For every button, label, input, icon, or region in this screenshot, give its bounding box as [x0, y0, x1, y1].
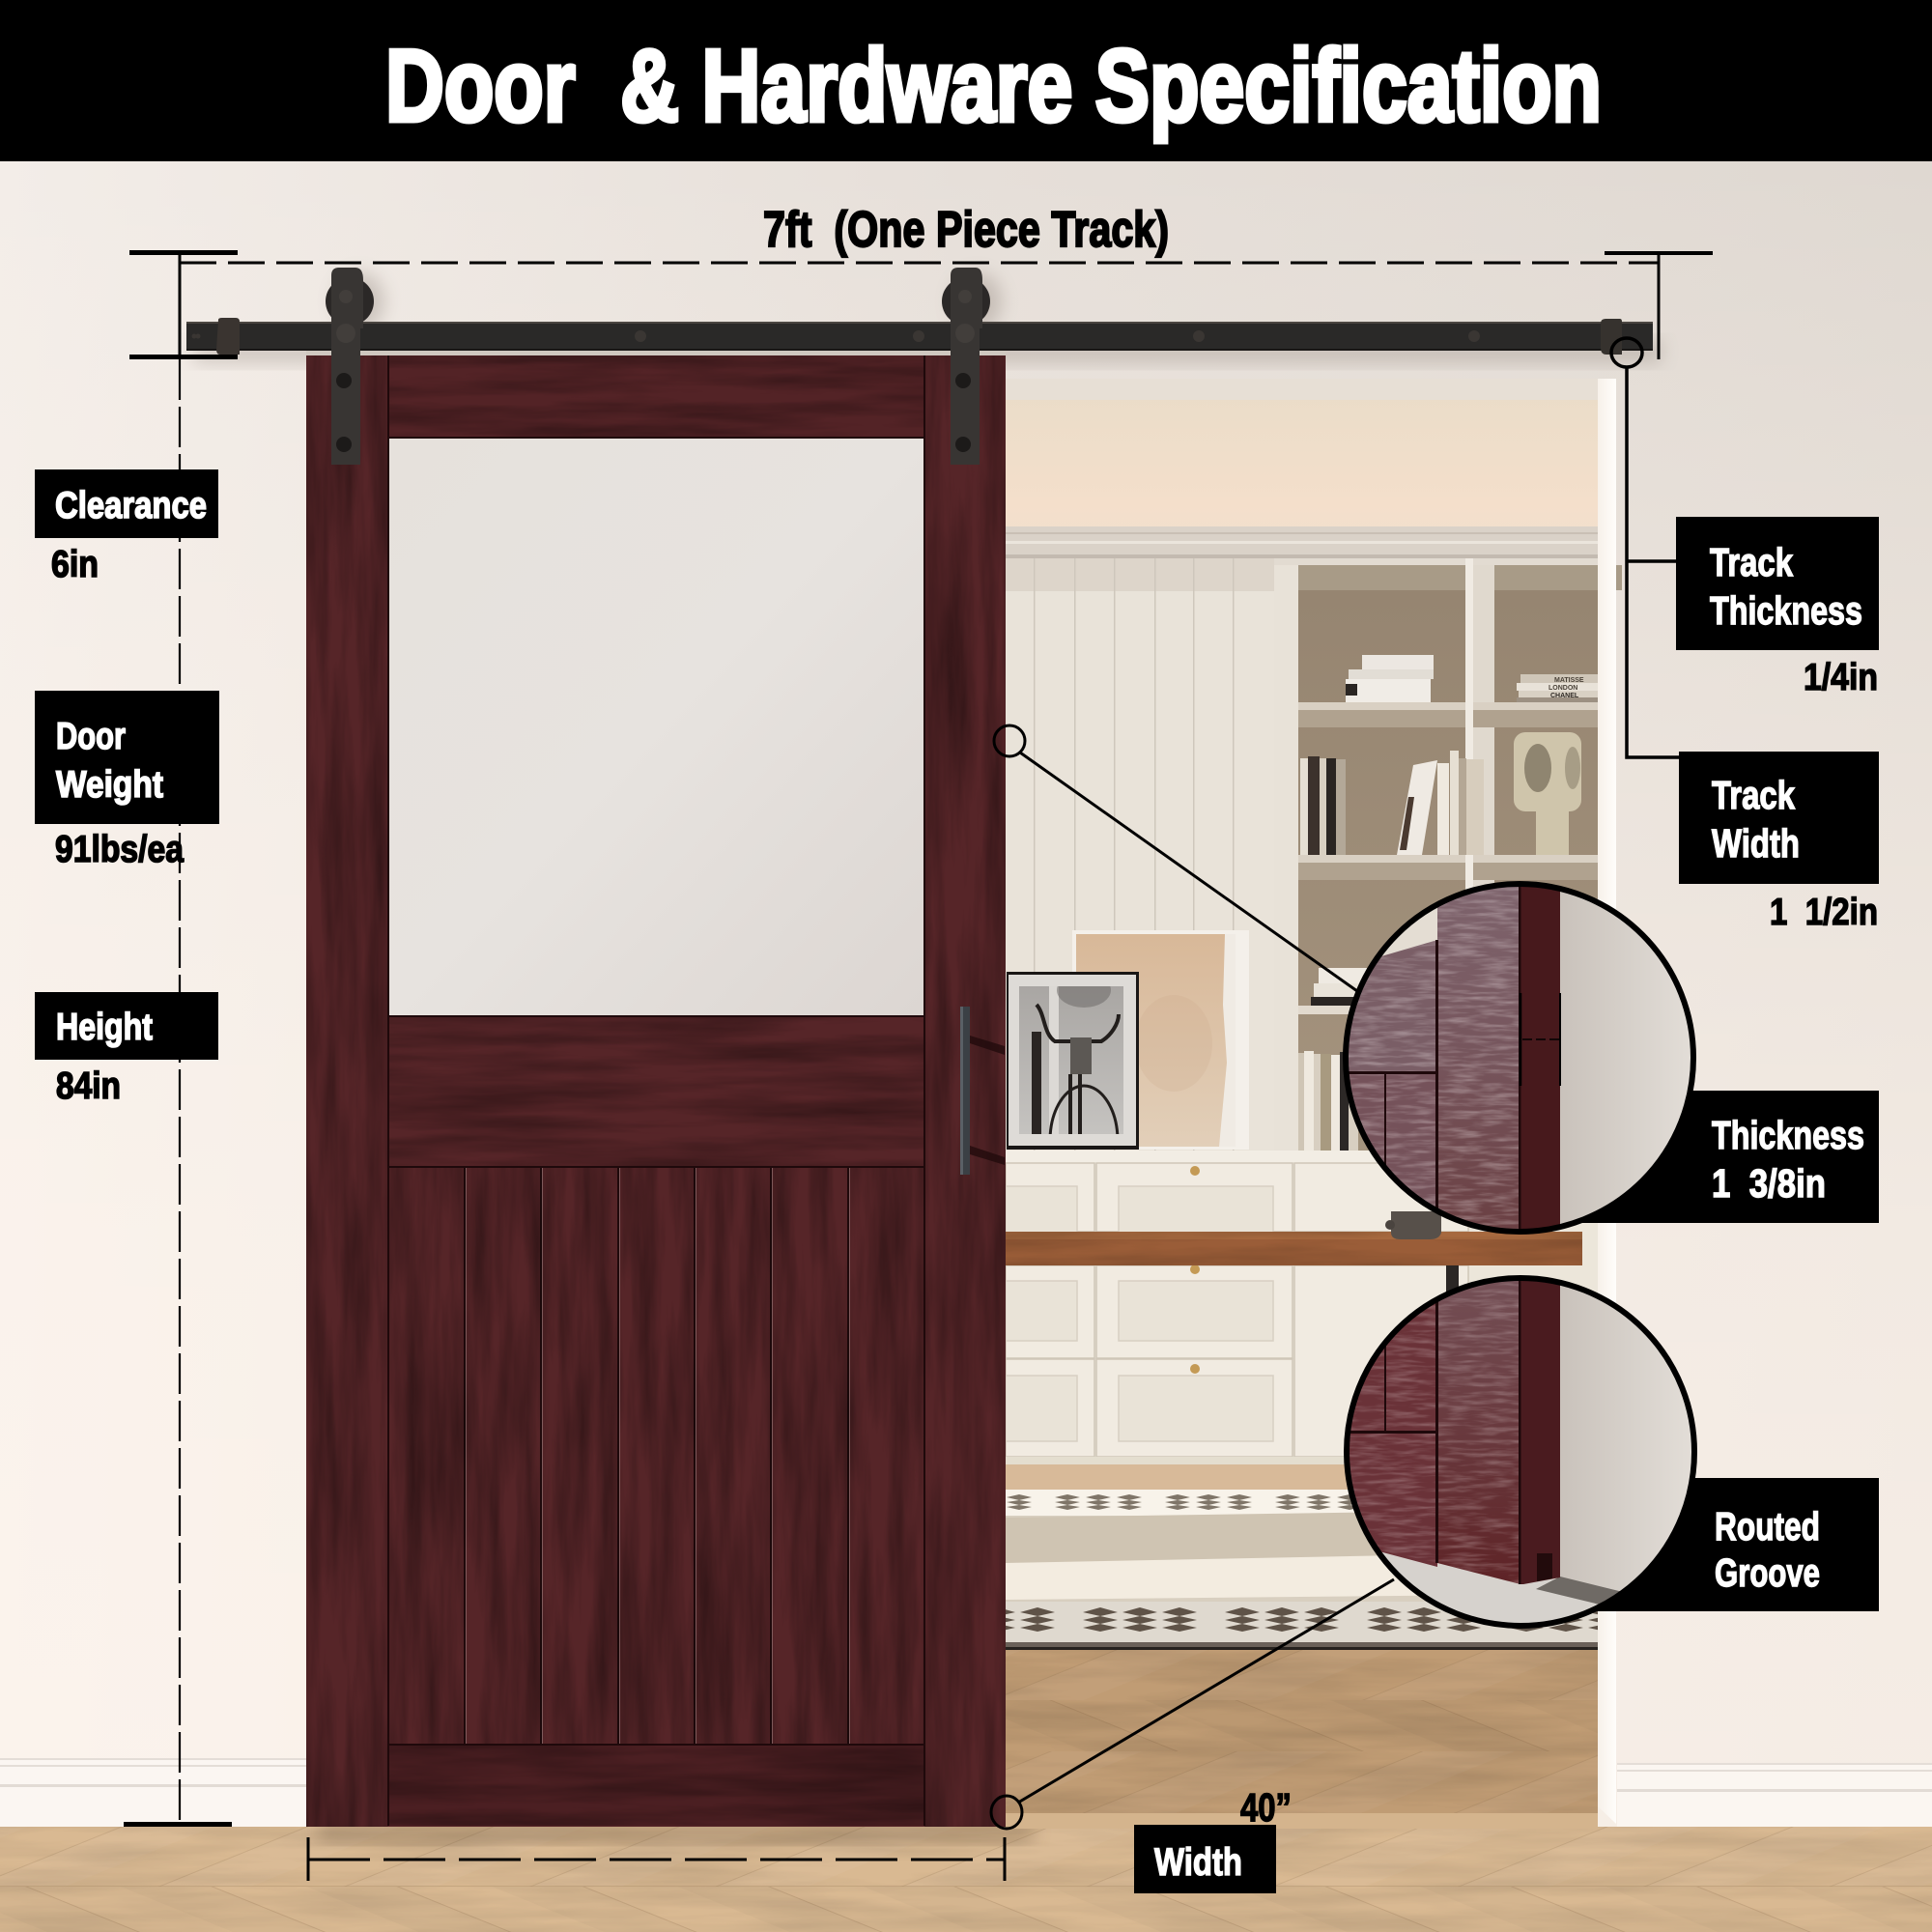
track thickness callout: 1/4in [1804, 657, 1878, 698]
canvas art [1072, 930, 1249, 1150]
track length label: 7ft (One Piece Track) [763, 202, 1169, 258]
books: fourth shelf [1298, 1051, 1358, 1151]
wood floor [0, 1824, 1932, 1932]
left stop [216, 318, 240, 355]
thickness label text: Thickness [1712, 1113, 1864, 1157]
thickness dimension marks [1520, 993, 1560, 1086]
door weight callout: 91lbs/ea [55, 829, 184, 870]
top rail [388, 355, 924, 438]
mug [1385, 1211, 1441, 1239]
zoom circle: routed groove [1343, 1275, 1700, 1633]
walnut table [1006, 1232, 1582, 1298]
bookshelves [1274, 558, 1622, 1161]
track thickness callout: Track [1710, 540, 1793, 584]
books: top right shelf: CHANEL [1550, 693, 1579, 699]
height callout: Height [56, 1007, 153, 1048]
track thickness callout [1676, 517, 1879, 698]
bottom rail [388, 1745, 924, 1826]
thickness label text: 1 3/8in [1712, 1161, 1826, 1206]
books: top shelf [1346, 655, 1434, 702]
door height dimension [124, 255, 238, 1827]
pull handle [960, 1007, 1005, 1175]
door weight callout: Door [56, 716, 126, 757]
height callout [35, 992, 218, 1107]
vertical plank panel [388, 1167, 924, 1745]
books: top right shelf [1517, 674, 1598, 702]
thickness label text [1712, 1113, 1864, 1206]
zoom circle: door thickness [1343, 879, 1700, 1236]
sliding track [186, 318, 1653, 355]
leader line to thickness detail [994, 725, 1357, 991]
title: Door & Hardware Specification [385, 29, 1602, 143]
door weight callout [35, 691, 219, 870]
door width dimension [308, 1837, 1005, 1881]
width callout: Width [1154, 1841, 1242, 1884]
width callout [1134, 1785, 1292, 1893]
clearance callout: 6in [51, 544, 99, 585]
header bar [0, 0, 1932, 161]
plank groove highlights [466, 1167, 850, 1745]
door weight callout: Weight [56, 764, 163, 806]
knobs [1190, 1166, 1200, 1374]
track bolts [191, 330, 1480, 342]
middle rail [388, 1016, 924, 1167]
clearance callout: Clearance [55, 485, 207, 526]
right door hanger [942, 268, 990, 465]
leader line to groove detail [991, 1579, 1394, 1829]
routed groove label text [1715, 1504, 1820, 1595]
right stop [1601, 319, 1622, 355]
crown moulding [1006, 526, 1598, 558]
books: top right shelf: LONDON [1548, 685, 1577, 692]
track shadow [193, 340, 1662, 363]
track width callout: Track [1712, 773, 1795, 817]
clearance callout [35, 469, 218, 585]
height callout: 84in [56, 1065, 121, 1107]
ceiling and soffit [1006, 379, 1616, 558]
books: third shelf [1311, 968, 1367, 1006]
routed groove label box [1584, 1478, 1879, 1611]
opening reveal [1598, 379, 1616, 1824]
cabinet run [1006, 1151, 1598, 1458]
track leader lines [1611, 338, 1681, 757]
sculpture [1514, 732, 1581, 855]
routed groove label text: Groove [1715, 1550, 1820, 1595]
room seen through the opening [1006, 379, 1622, 1829]
track thickness callout: Thickness [1710, 588, 1862, 633]
track width callout: Width [1712, 821, 1800, 866]
beadboard wall [1006, 558, 1276, 1167]
gap light under the track [306, 351, 1006, 355]
glass pane [388, 438, 924, 1016]
track width callout [1679, 752, 1879, 933]
wood grain [306, 355, 1006, 1827]
framed bicycle photo [1007, 972, 1139, 1150]
hanger wheel shadows [334, 272, 1002, 330]
books: second shelf [1300, 751, 1484, 855]
rug and room floor [1006, 1457, 1598, 1829]
thickness label box [1573, 1091, 1879, 1223]
track length dimension [129, 202, 1713, 359]
width callout: 40” [1240, 1785, 1292, 1830]
track width callout: 1 1/2in [1770, 892, 1878, 933]
books: top right shelf: MATISSE [1554, 677, 1584, 684]
routed groove label text: Routed [1715, 1504, 1820, 1548]
left door hanger [326, 268, 374, 465]
